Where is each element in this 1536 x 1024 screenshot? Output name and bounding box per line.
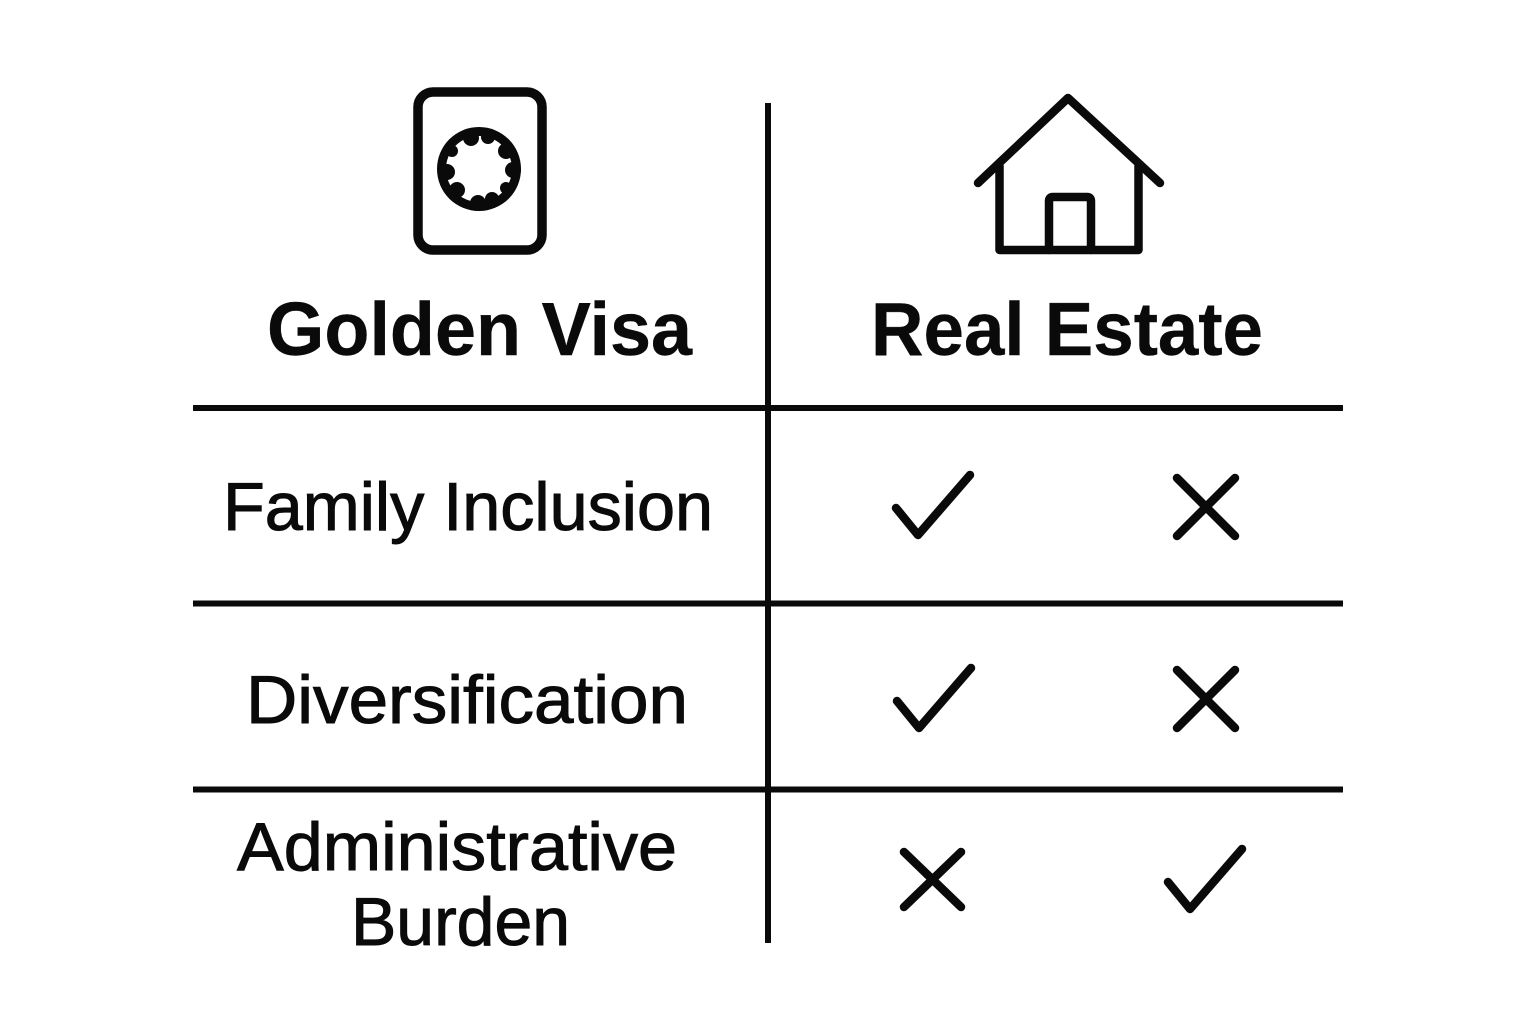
icon: check, family inclusion golden visa: [896, 475, 970, 535]
icon: house: [978, 98, 1160, 250]
row label: Administrative Burden: Burden: [351, 884, 570, 960]
row label: Family Inclusion: Family Inclusion: [223, 469, 713, 545]
heading: Real Estate: Real Estate: [871, 287, 1263, 371]
row label: Diversification: Diversification: [246, 662, 688, 738]
icon: passport: [418, 92, 542, 250]
icon: check, diversification golden visa: [897, 668, 971, 728]
icon: check, administrative burden real estate: [1168, 849, 1242, 909]
icon: cross, family inclusion real estate: [1177, 478, 1235, 536]
icon: cross, diversification real estate: [1177, 670, 1235, 728]
row label: Administrative Burden: [237, 809, 677, 960]
icon: cross, administrative burden golden visa: [904, 852, 961, 907]
row label: Administrative Burden: Administrative: [237, 809, 677, 885]
heading: Golden Visa: Golden Visa: [267, 287, 693, 371]
